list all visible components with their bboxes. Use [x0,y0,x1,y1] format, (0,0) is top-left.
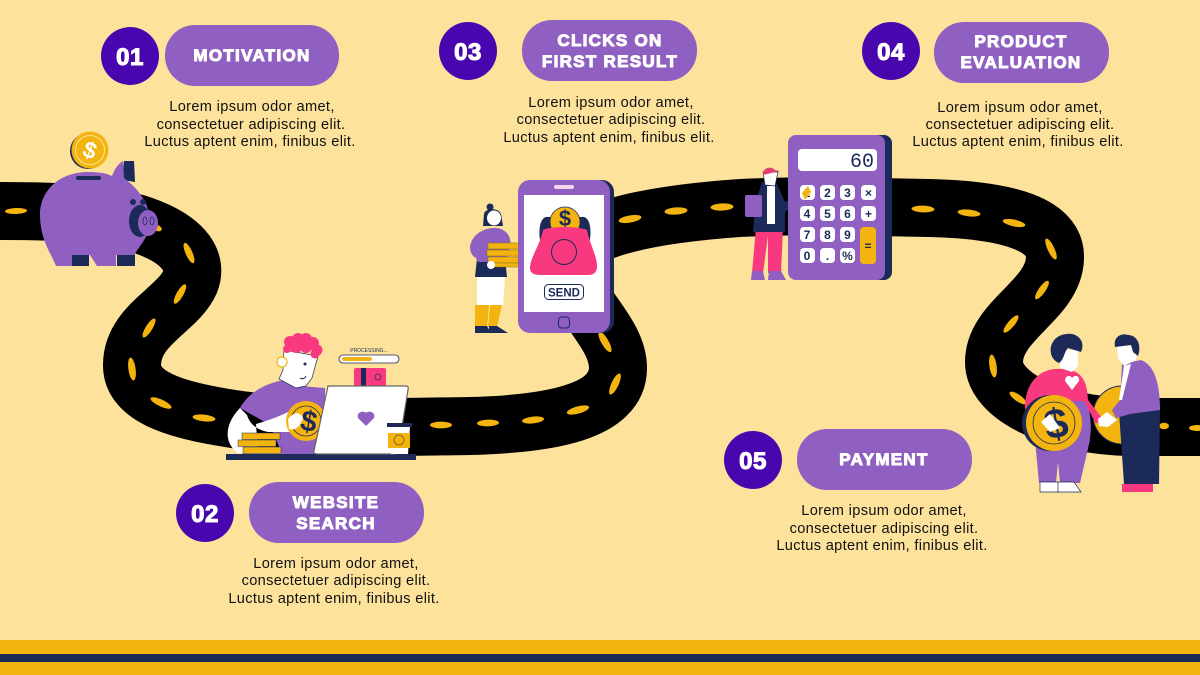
illustration: woman holding coins [470,204,522,333]
step 04 heading group [862,22,1109,83]
calculator screen [798,149,877,174]
badge 05: 05 [739,448,767,475]
purse [530,227,597,275]
progress bar [339,348,399,363]
badge 04: 04 [877,39,905,66]
step 05 heading group [724,429,972,490]
big coin: $ [1041,398,1072,449]
pill: clicks on first result [522,20,697,81]
pill: product evaluation: PRODUCT [974,32,1068,51]
far coin [1093,386,1151,444]
illustration: person at laptop [226,333,416,460]
badge 02: 02 [191,501,219,528]
legs [752,228,783,273]
illustration: phone with purse [518,180,614,333]
man head [1117,345,1137,366]
pink curly hair [283,333,322,358]
torso [240,380,325,454]
pill: motivation: MOTIVATION [193,46,311,65]
man torso [1112,360,1160,418]
pill: website search: WEBSITE [293,493,379,512]
calculator: × [865,186,872,200]
text: step 02 description: Luctus aptent enim, finibus elit. [228,591,440,607]
badge 03: 03 [454,39,482,66]
jacket [753,182,806,232]
calculator: 2 [824,186,831,200]
woman torso [1025,369,1102,424]
calculator [788,135,892,280]
heart [1065,376,1079,390]
calculator: 5 [824,207,831,221]
woman legs [1035,440,1090,483]
text: step 01 description: consectetuer adipiscing elit. [157,117,345,133]
purse frame [539,217,591,240]
hair and head [486,204,494,210]
calculator: 6 [844,207,851,221]
text: step 03 description: Luctus aptent enim, finibus elit. [503,130,715,146]
text: step 05 description: consectetuer adipiscing elit. [790,521,978,537]
illustration: handshake with coins [1022,334,1160,492]
dollar coin: $ [298,405,320,439]
heart [358,412,374,426]
icon: piggy bank with coin [40,132,158,266]
calculator: % [842,249,853,263]
pill: product evaluation: EVALUATION [961,53,1081,72]
text: step 02 description: consectetuer adipiscing elit. [242,573,430,589]
text: step 01 description: Lorem ipsum odor amet, [169,99,335,115]
man legs [1119,410,1160,484]
badge 03 [439,22,497,80]
calculator: 1 [804,186,811,200]
road dashes [5,203,1200,431]
progress bar: PROCESSING... [350,348,388,354]
text: step 02 description: Lorem ipsum odor amet, [253,556,419,572]
coffee cup [387,423,412,454]
dollar coin [286,401,326,441]
calculator: 4 [804,207,811,221]
pill: clicks on first result: FIRST RESULT [542,52,678,71]
text: step 05 description: Lorem ipsum odor amet, [801,503,967,519]
send button [544,284,584,300]
badge 01: 01 [116,44,144,71]
calculator keys [800,185,876,263]
illustration: man pointing at calculator [745,135,892,280]
winding road [0,203,1200,431]
badge 01 [101,27,159,85]
calculator screen: 60 [850,151,874,174]
big coin [1022,395,1082,451]
calculator: + [865,207,872,221]
send button: SEND [548,288,580,300]
calculator: 9 [844,228,851,242]
pill: product evaluation [934,22,1109,83]
text: step 04 description: consectetuer adipiscing elit. [926,117,1114,133]
pill: website search [249,482,424,543]
calculator: 3 [844,186,851,200]
laptop [314,386,408,454]
pill: payment [797,429,972,490]
calculator: 0 [804,249,811,263]
woman skirt [1060,400,1091,447]
pill: website search: SEARCH [296,514,376,533]
badge 04 [862,22,920,80]
coin in purse [550,206,580,237]
card [354,368,386,388]
footer stripes [0,640,1200,675]
clipboard [745,195,762,217]
text: step 03 description: consectetuer adipiscing elit. [517,112,705,128]
step 01 heading group [101,25,339,86]
legs [477,277,505,306]
badge 02 [176,484,234,542]
skirt [475,258,507,277]
pill: motivation [165,25,339,86]
pill: clicks on first result: CLICKS ON [557,31,663,50]
calculator: . [826,249,829,263]
coins [487,243,522,267]
phone screen [524,195,604,312]
calculator: = [864,239,872,253]
icon: coin: $ [80,136,101,164]
pill: payment: PAYMENT [839,450,929,469]
coin stack [238,433,281,454]
text: step 05 description: Luctus aptent enim, finibus elit. [776,538,988,554]
home button [558,317,570,328]
head and neck [279,350,318,388]
arm [228,408,300,453]
coin in purse: $ [559,206,571,231]
desk [226,454,416,460]
woman head [1060,350,1078,372]
text: step 04 description: Lorem ipsum odor amet, [937,100,1103,116]
handshake [1098,412,1117,427]
step 03 heading group [439,20,697,81]
calculator: 8 [824,228,831,242]
badge 05 [724,431,782,489]
step 02 heading group [176,482,424,543]
text: step 04 description: Luctus aptent enim, finibus elit. [912,134,1124,150]
text: step 01 description: Luctus aptent enim, finibus elit. [144,134,356,150]
torso [470,228,510,262]
calculator: 7 [804,228,811,242]
head [763,172,778,186]
text: step 03 description: Lorem ipsum odor amet, [528,95,694,111]
pointing hand [802,186,811,200]
